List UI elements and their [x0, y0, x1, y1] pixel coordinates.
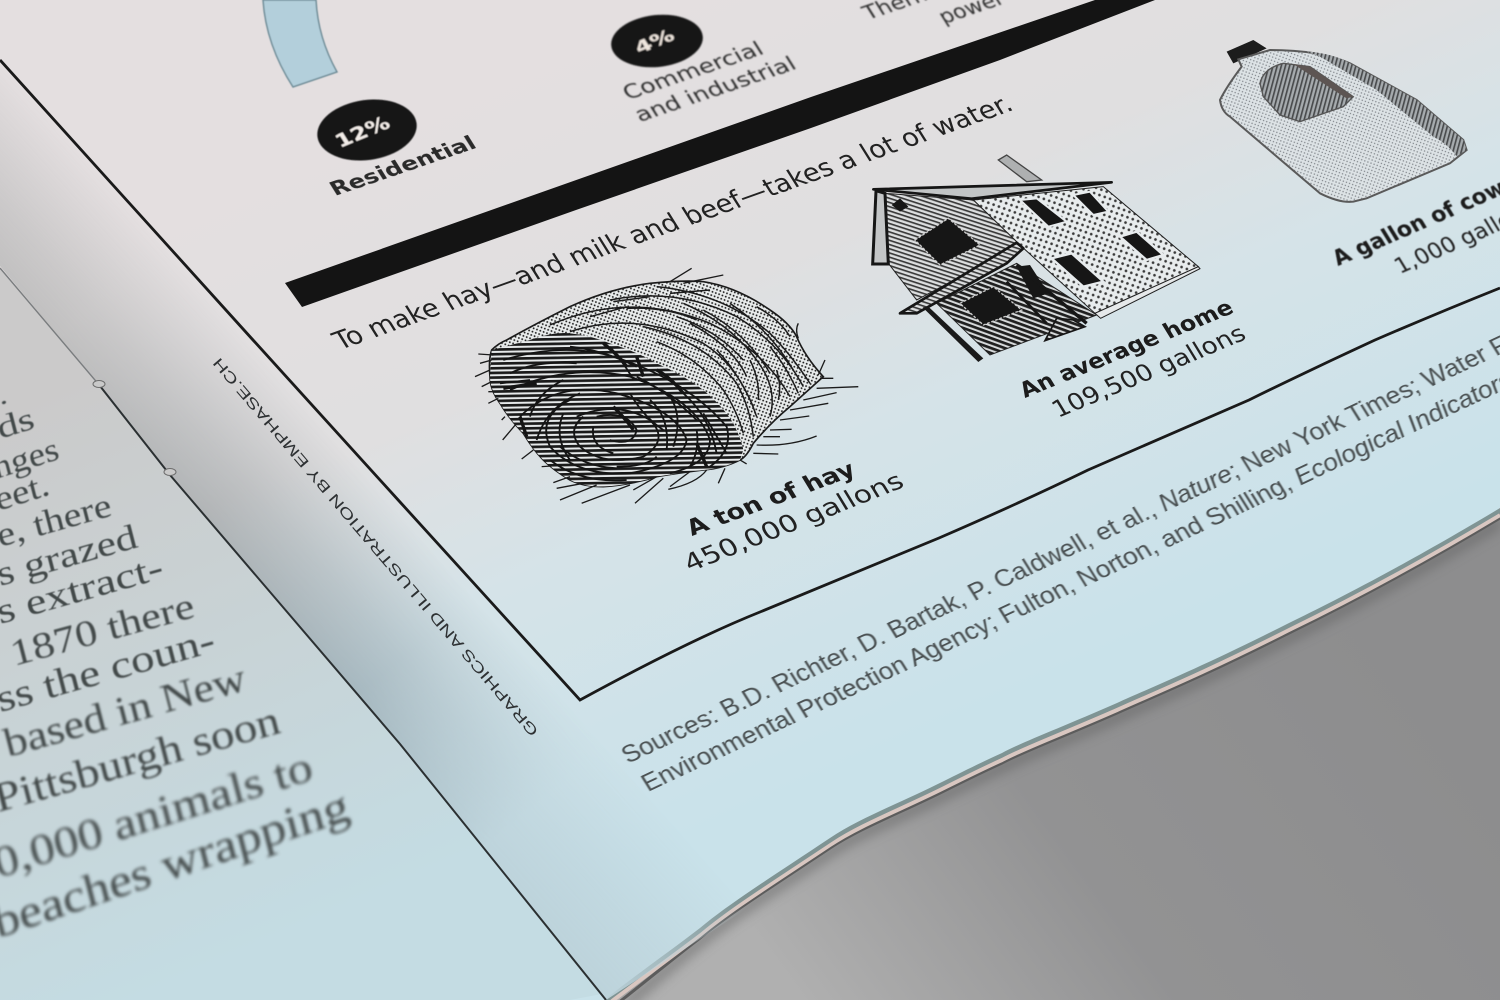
heading: to make hay: To make hay—and milk and beef—takes a lot of water. [327, 90, 1019, 356]
lower wall [937, 263, 1097, 355]
roof [873, 182, 1112, 199]
heavy black divider bar [285, 0, 1155, 307]
frame border line [0, 60, 1500, 700]
text block: left page article, blurred foreground: 1870 there [6, 585, 198, 674]
label: an average home: 109,500 gallons [1046, 319, 1251, 423]
label: commercial and industrial: and industrial [630, 53, 801, 127]
text block: left page article, blurred foreground: based in New [0, 655, 250, 766]
page edge shadow [625, 522, 1500, 1000]
chart: water use arc segment [263, 0, 337, 87]
left side sliver [873, 191, 888, 264]
illustration: average home [873, 155, 1200, 362]
badge: commercial 4%: 4% [631, 26, 678, 58]
text block: left page article [0, 380, 167, 632]
badge: residential 12% [313, 93, 421, 167]
badge: residential 12%: 12% [331, 112, 394, 152]
chimney [998, 155, 1042, 182]
text block: sources: Environmental Protection Agency; Fulton, Norton, and Shilling, Ecological Indicators [637, 367, 1500, 797]
label: commercial and industrial: Commercial [618, 38, 768, 105]
gable wall [885, 193, 1020, 300]
windows [1020, 198, 1067, 227]
door [1017, 265, 1048, 298]
gutter line and stitches [0, 268, 606, 1000]
gutter shadow on right page [0, 110, 736, 1000]
illustration: milk gallon jug [1220, 40, 1467, 202]
porch pillar [923, 307, 983, 362]
credit: vertical illustration credit: GRAPHICS AND ILLUSTRATION BY EMPHASE.CH [210, 354, 542, 739]
label: commercial and industrial [618, 38, 801, 127]
label: an average home: An average home [1015, 295, 1238, 403]
steps [1045, 318, 1085, 341]
porch roof [900, 243, 1023, 313]
panel: left magazine page [0, 268, 602, 1000]
illustration: hay bale [475, 268, 858, 503]
label: a ton of hay: 450,000 gallons [678, 467, 909, 578]
right wall [973, 187, 1198, 313]
text block: left page article, blurred foreground [0, 585, 354, 948]
label: a ton of hay: A ton of hay [681, 456, 860, 541]
label: residential: Residential [325, 132, 481, 201]
stacked page edges [606, 510, 1500, 1000]
badge: commercial 4% [609, 10, 705, 72]
